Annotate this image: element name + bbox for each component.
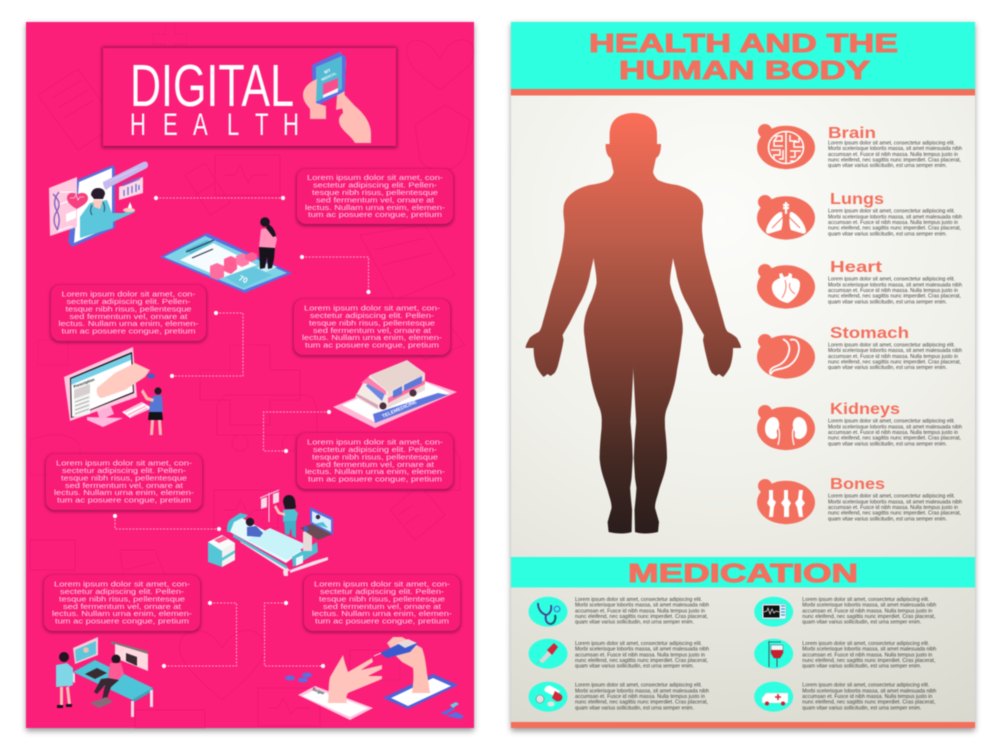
title box [102,47,397,148]
description [575,683,709,711]
description: Lorem ipsum dolor sit amet, consectetur adipiscing elit. [802,597,929,603]
description: accumsan et. Fusce id nibh massa. Nulla tempus justo in [828,220,958,226]
organ: brain [757,124,962,169]
panel: digital health poster [26,22,474,731]
description: Lorem ipsum dolor sit amet, consectetur adipiscing elit. [575,683,702,689]
text box 2: tesque nibh risus, pellentesque [66,305,192,313]
icon: pills [528,682,568,712]
illustration: patient in hospital bed [208,490,333,576]
text box 4 [296,433,454,490]
text box 7: sectetur adipiscing elit. Pellen- [320,588,445,596]
description: Morbi scelerisque lobortis massa, sit amet malesuada nibh [828,348,962,354]
icon: bones [757,479,815,524]
description [828,140,962,169]
text box 3: sed fermentum vel, ornare at [313,327,431,335]
description: nunc eleifend, nec sagittis nunc imperdiet. Cras placerat, [802,700,935,706]
text box 6: Lorem ipsum dolor sit amet, con- [54,580,191,588]
organ: bones [757,476,962,524]
illustration: tablet with woman on scale [160,217,292,293]
title text: HEALTH [130,106,299,142]
medication item: blood bag [754,639,936,670]
label: Stomach [830,325,909,342]
description: Lorem ipsum dolor sit amet, consectetur adipiscing elit. [828,277,955,283]
label: Brain [828,125,876,142]
description: accumsan et. Fusce id nibh massa. Nulla tempus justo in [802,652,932,658]
text box 3: Lorem ipsum dolor sit amet, con- [304,304,441,312]
text box 1 [296,169,454,226]
text box 2 [50,285,206,342]
text box 6: tesque nibh risus, pellentesque [59,595,185,603]
description: Lorem ipsum dolor sit amet, consectetur adipiscing elit. [828,419,955,425]
description: quam vitae varius sollicitudin, est urna semper enim. [828,516,947,522]
medication item: stethoscope [528,597,709,627]
description: accumsan et. Fusce id nibh massa. Nulla tempus justo in [575,652,705,658]
description: nunc eleifend, nec sagittis nunc imperdiet. Cras placerat, [802,658,935,664]
medication item: syringe [528,639,709,670]
illustration: online prescription on monitor [64,347,163,435]
description: accumsan et. Fusce id nibh massa. Nulla tempus justo in [828,354,958,360]
icon: lungs [757,195,815,240]
text box 6: tum ac posuere congue, pretium [55,618,189,626]
text box 1: lectus. Nullam urna enim, elemen- [305,204,446,212]
description: accumsan et. Fusce id nibh massa. Nulla tempus justo in [828,505,958,511]
illustration: tablet with woman on scale: 70 [237,274,249,286]
text box 7: lectus. Nullam urna enim, elemen- [312,610,453,618]
description: Lorem ipsum dolor sit amet, consectetur adipiscing elit. [828,140,955,146]
text box 3: sectetur adipiscing elit. Pellen- [310,312,435,320]
text box 4: sed fermentum vel, ornare at [316,461,434,469]
medication band [511,557,975,588]
label: Bones [830,476,885,493]
description: Morbi scelerisque lobortis massa, sit amet malesuada nibh [575,688,709,694]
description: accumsan et. Fusce id nibh massa. Nulla tempus justo in [575,694,705,700]
icon: heart [757,264,815,309]
description: quam vitae varius sollicitudin, est urna semper enim. [802,620,921,626]
description: nunc eleifend, nec sagittis nunc imperdiet. Cras placerat, [802,614,935,620]
description: quam vitae varius sollicitudin, est urna semper enim. [828,365,947,371]
description [828,209,962,237]
icon: stomach [757,334,815,379]
description: accumsan et. Fusce id nibh massa. Nulla tempus justo in [575,608,705,614]
text box 7: tum ac posuere congue, pretium [315,618,449,626]
medication item: ambulance [754,682,936,712]
icon: kidneys [757,405,815,450]
description: nunc eleifend, nec sagittis nunc imperdiet. Cras placerat, [575,700,708,706]
text box 3: tum ac posuere congue, pretium [305,342,439,350]
text box 5: sectetur adipiscing elit. Pellen- [62,467,187,475]
icon: blood bag [754,639,793,669]
medication heading: MEDICATION [628,558,858,588]
text box 1: tesque nibh risus, pellentesque [312,189,438,197]
text box 5: tesque nibh risus, pellentesque [61,474,187,482]
label: Kidneys [830,401,900,418]
description: quam vitae varius sollicitudin, est urna semper enim. [802,705,921,711]
text box 2: sectetur adipiscing elit. Pellen- [66,298,191,306]
description: quam vitae varius sollicitudin, est urna semper enim. [802,664,921,670]
description: accumsan et. Fusce id nibh massa. Nulla tempus justo in [802,694,932,700]
description: Lorem ipsum dolor sit amet, consectetur adipiscing elit. [828,494,955,500]
organ: heart [757,259,962,309]
connector lines with dots [113,196,371,668]
description [828,419,962,447]
text box 4: sectetur adipiscing elit. Pellen- [313,446,438,454]
text box 5: tum ac posuere congue, pretium [57,497,191,505]
description: Morbi scelerisque lobortis massa, sit amet malesuada nibh [575,603,709,609]
text box 4: Lorem ipsum dolor sit amet, con- [307,438,444,446]
text box 7: Lorem ipsum dolor sit amet, con- [314,580,451,588]
text box 5 [46,454,202,512]
label: Lungs [830,191,884,208]
illustration: hands with glucose meter and phones [285,637,464,720]
description: quam vitae varius sollicitudin, est urna semper enim. [828,299,947,305]
header band: HUMAN BODY [619,55,870,85]
text box 6: sed fermentum vel, ornare at [63,603,181,611]
illustration: telemedicine ambulance: TELEMEDICINE [381,399,418,420]
description: nunc eleifend, nec sagittis nunc imperdiet. Cras placerat, [828,436,961,442]
text box 6 [44,575,200,632]
organ: lungs [757,191,962,240]
text box 2: Lorem ipsum dolor sit amet, con- [62,290,196,298]
icon: brain [757,124,815,169]
human body silhouette [526,113,741,534]
description: accumsan et. Fusce id nibh massa. Nulla tempus justo in [828,152,958,158]
text box 5: sed fermentum vel, ornare at [65,482,183,490]
description [575,641,709,670]
text box 4: lectus. Nullam urna enim, elemen- [305,468,446,476]
text box 5: lectus. Nullam urna enim, elemen- [54,489,195,497]
medication item: heart monitor [754,597,936,627]
description: Morbi scelerisque lobortis massa, sit amet malesuada nibh [802,688,936,694]
illustration: hands with glucose meter and phones: Sugar [312,686,326,696]
description: Lorem ipsum dolor sit amet, consectetur adipiscing elit. [828,342,955,348]
illustration: telemedicine ambulance [333,360,457,428]
icon: syringe [528,639,568,669]
description: nunc eleifend, nec sagittis nunc imperdiet. Cras placerat, [828,226,961,232]
text box 7: sed fermentum vel, ornare at [323,603,441,611]
medication item: pills [528,682,709,712]
text box 5: Lorem ipsum dolor sit amet, con- [56,460,193,468]
text box 6: lectus. Nullam urna enim, elemen- [52,610,193,618]
description [802,597,936,626]
description: quam vitae varius sollicitudin, est urna semper enim. [828,231,947,237]
description [828,494,962,522]
panel: health and the human body poster [511,22,975,731]
description: Morbi scelerisque lobortis massa, sit amet malesuada nibh [828,146,962,152]
description: quam vitae varius sollicitudin, est urna semper enim. [575,620,694,626]
text box 3 [294,299,450,356]
description: Lorem ipsum dolor sit amet, consectetur adipiscing elit. [802,641,929,647]
footer bar [511,722,975,728]
description: Lorem ipsum dolor sit amet, consectetur adipiscing elit. [575,641,702,647]
description: nunc eleifend, nec sagittis nunc imperdiet. Cras placerat, [575,658,708,664]
title text: DIGITAL [130,53,294,119]
description: Morbi scelerisque lobortis massa, sit amet malesuada nibh [802,603,936,609]
icon: ambulance [754,682,793,712]
illustration: doctor on tablet [49,162,148,247]
icon: heart monitor [754,597,793,627]
illustration: online prescription on monitor: Prescription [73,377,96,389]
icon: hands holding phone: MY [323,68,332,75]
description: Morbi scelerisque lobortis massa, sit amet malesuada nibh [828,282,962,288]
icon: hands holding phone: MEDICAL [321,71,338,82]
text box 1: tum ac posuere congue, pretium [308,211,442,219]
description: accumsan et. Fusce id nibh massa. Nulla tempus justo in [802,608,932,614]
text box 3: tesque nibh risus, pellentesque [309,319,435,327]
description: Lorem ipsum dolor sit amet, consectetur adipiscing elit. [575,597,702,603]
description: Morbi scelerisque lobortis massa, sit amet malesuada nibh [802,647,936,653]
description: Lorem ipsum dolor sit amet, consectetur adipiscing elit. [828,209,955,215]
description: Morbi scelerisque lobortis massa, sit amet malesuada nibh [828,499,962,505]
description: quam vitae varius sollicitudin, est urna semper enim. [575,664,694,670]
description: accumsan et. Fusce id nibh massa. Nulla tempus justo in [828,430,958,436]
organ: stomach [757,325,962,379]
icon: stethoscope [528,597,568,627]
text box 6: sectetur adipiscing elit. Pellen- [60,588,185,596]
description: quam vitae varius sollicitudin, est urna semper enim. [828,163,947,169]
text box 7: tesque nibh risus, pellentesque [319,595,445,603]
description [802,683,936,711]
description: quam vitae varius sollicitudin, est urna semper enim. [575,705,694,711]
description [802,641,936,670]
text box 1: sectetur adipiscing elit. Pellen- [313,182,438,190]
text box 4: tesque nibh risus, pellentesque [312,453,438,461]
text box 2: sed fermentum vel, ornare at [70,313,188,321]
description: nunc eleifend, nec sagittis nunc imperdiet. Cras placerat, [828,511,961,517]
description: Lorem ipsum dolor sit amet, consectetur adipiscing elit. [802,683,929,689]
text box 1: Lorem ipsum dolor sit amet, con- [307,174,444,182]
heading: HEALTH AND THE [589,28,898,58]
description: nunc eleifend, nec sagittis nunc imperdiet. Cras placerat, [828,360,961,366]
organ: kidneys [757,401,962,450]
header band [511,22,975,96]
description: nunc eleifend, nec sagittis nunc imperdiet. Cras placerat, [828,158,961,164]
description [828,342,962,371]
text box 4: tum ac posuere congue, pretium [308,476,442,484]
text box 1: sed fermentum vel, ornare at [316,196,434,204]
description: Morbi scelerisque lobortis massa, sit amet malesuada nibh [828,424,962,430]
description: Morbi scelerisque lobortis massa, sit amet malesuada nibh [575,647,709,653]
description [828,277,962,305]
description: nunc eleifend, nec sagittis nunc imperdiet. Cras placerat, [575,614,708,620]
label: Heart [830,259,882,276]
title text [130,53,299,142]
icon: hands holding phone [303,52,371,143]
description: Morbi scelerisque lobortis massa, sit amet malesuada nibh [828,214,962,220]
text box 3: lectus. Nullam urna enim, elemen- [302,334,443,342]
description: accumsan et. Fusce id nibh massa. Nulla tempus justo in [828,288,958,294]
description: nunc eleifend, nec sagittis nunc imperdiet. Cras placerat, [828,294,961,300]
illustration: doctor and patient at exam table [56,637,153,717]
description [575,597,709,626]
text box 2: lectus. Nullam urna enim, elemen- [58,320,199,328]
text box 7 [304,575,460,632]
description: quam vitae varius sollicitudin, est urna semper enim. [828,441,947,447]
text box 2: tum ac posuere congue, pretium [62,328,196,336]
